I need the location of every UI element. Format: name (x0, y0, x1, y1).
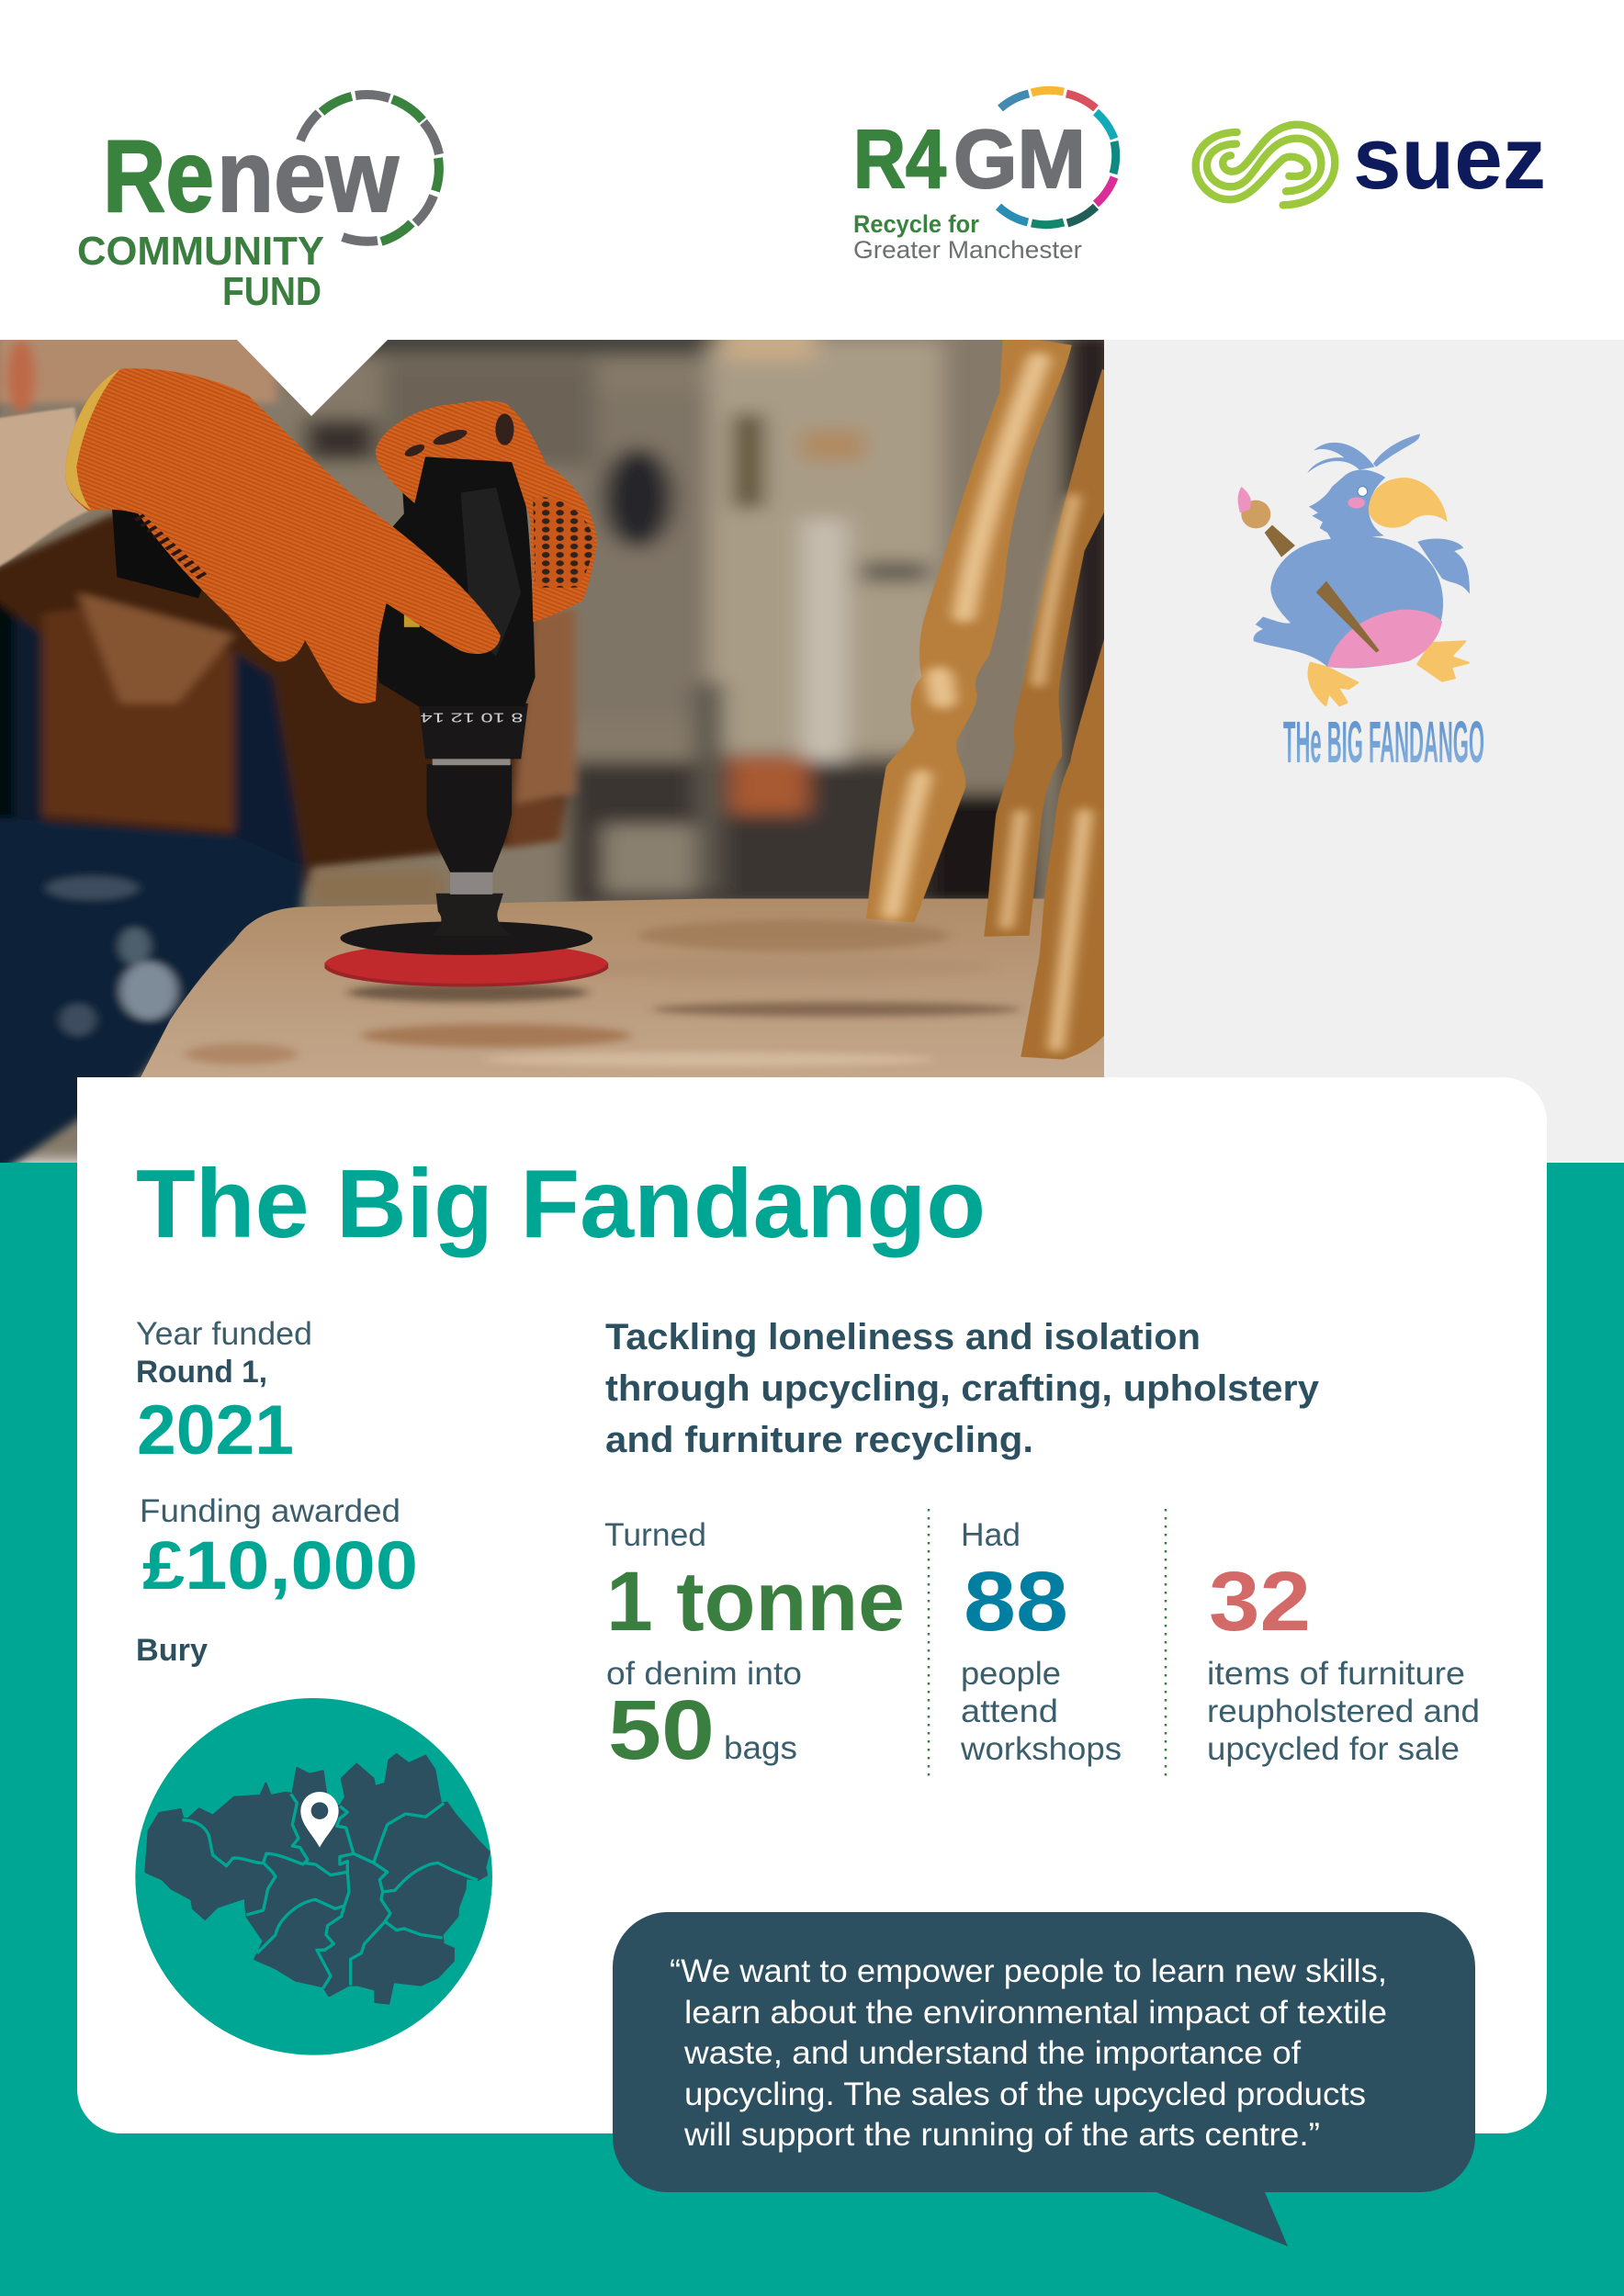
logo: Renew Community Fund (77, 95, 439, 314)
callout: quote speech bubble: “We want to empower people to learn new skills, (670, 1953, 1387, 1989)
grey logo panel (1104, 340, 1624, 1163)
stat: 1 tonne of denim into 50 bags (604, 1517, 905, 1777)
stat: 88 people attend workshops: workshops (960, 1731, 1122, 1767)
stat: 88 people attend workshops: attend (961, 1694, 1058, 1729)
icon: swirl (1196, 125, 1335, 205)
text: tagline (605, 1317, 1320, 1460)
callout: quote speech bubble: upcycling. The sales of the upcycled products (684, 2077, 1366, 2112)
text: funding awarded (140, 1493, 418, 1604)
photo notch (236, 339, 389, 416)
stat: 1 tonne of denim into 50 bags: Turned (604, 1517, 706, 1553)
stat: 32 items of furniture (1207, 1555, 1480, 1767)
photo background: blurred workshop (0, 319, 1134, 1162)
text: year funded: 2021 (137, 1391, 294, 1469)
stat: 1 tonne of denim into 50 bags: 1 tonne (606, 1555, 905, 1649)
icon: map pin (300, 1792, 339, 1848)
text: tagline: Tackling loneliness and isolation (605, 1317, 1201, 1357)
text: tagline: through upcycling, crafting, upholstery (605, 1368, 1320, 1409)
panel: white card (77, 1077, 1547, 2133)
photo: drill and sanding pad: 8 10 12 14 (420, 710, 524, 726)
stat: 1 tonne of denim into 50 bags: of denim into (606, 1656, 802, 1692)
photo: chair spindles (866, 334, 1111, 1060)
logo: R4GM Recycle for Greater Manchester (853, 90, 1116, 264)
callout: quote speech bubble: learn about the environmental impact of textile (684, 1995, 1387, 2031)
callout: quote speech bubble: waste, and understand the importance of (683, 2035, 1301, 2071)
stat: 32 items of furniture: upcycled for sale (1207, 1731, 1460, 1767)
photo: person, shirt and apron (0, 324, 576, 1183)
callout: quote speech bubble: will support the running of the arts centre.” (683, 2117, 1320, 2153)
logo: Renew Community Fund: Re (103, 119, 214, 233)
stat: 88 people attend workshops: 88 (964, 1555, 1068, 1649)
logo: The Big Fandango bird (1238, 433, 1484, 775)
teal lower background (0, 1163, 1624, 2296)
title: The Big Fandango (136, 1150, 986, 1258)
stat: 88 people attend workshops: Had (961, 1517, 1021, 1553)
icon: bird (1238, 433, 1470, 705)
logo: Renew Community Fund: COMMUNITY (77, 229, 324, 274)
stat: 32 items of furniture: 32 (1209, 1555, 1311, 1649)
photo: drill and sanding pad (112, 452, 608, 986)
logo: SUEZ (1196, 109, 1546, 208)
text: funding awarded: Funding awarded (140, 1493, 400, 1529)
logo: R4GM Recycle for Greater Manchester: GM (953, 114, 1086, 206)
stat: 1 tonne of denim into 50 bags: bags (724, 1730, 797, 1766)
logo: Renew Community Fund: FUND (222, 269, 321, 314)
stat: 88 people attend workshops (960, 1517, 1122, 1767)
photo: hands sanding a chair with a drill (0, 319, 1134, 1183)
photo: chair seat (141, 898, 1113, 1078)
text: location: Bury (136, 1633, 208, 1668)
callout: quote speech bubble (613, 1912, 1475, 2246)
text: year funded (136, 1316, 312, 1469)
text: tagline: and furniture recycling. (605, 1420, 1033, 1460)
stat: 88 people attend workshops: people (961, 1656, 1061, 1692)
logo: R4GM Recycle for Greater Manchester: Recycle for (853, 210, 979, 238)
map: Greater Manchester with pin on Bury (135, 1698, 492, 2055)
stat: 32 items of furniture: reupholstered and (1207, 1694, 1480, 1729)
logo: Renew Community Fund: new (217, 119, 400, 233)
logo: SUEZ: suez (1353, 109, 1546, 208)
photo: orange gloves (65, 368, 597, 703)
logo: R4GM Recycle for Greater Manchester: Greater Manchester (853, 236, 1082, 264)
text: year funded: Round 1, (136, 1355, 267, 1390)
stat: 32 items of furniture: items of furniture (1207, 1656, 1465, 1692)
stat: 1 tonne of denim into 50 bags: 50 (608, 1683, 715, 1777)
text: funding awarded: £10,000 (142, 1527, 418, 1604)
logo: R4GM Recycle for Greater Manchester: R4 (853, 114, 946, 206)
photo: forearm (0, 407, 88, 570)
text: year funded: Year funded (136, 1316, 312, 1352)
